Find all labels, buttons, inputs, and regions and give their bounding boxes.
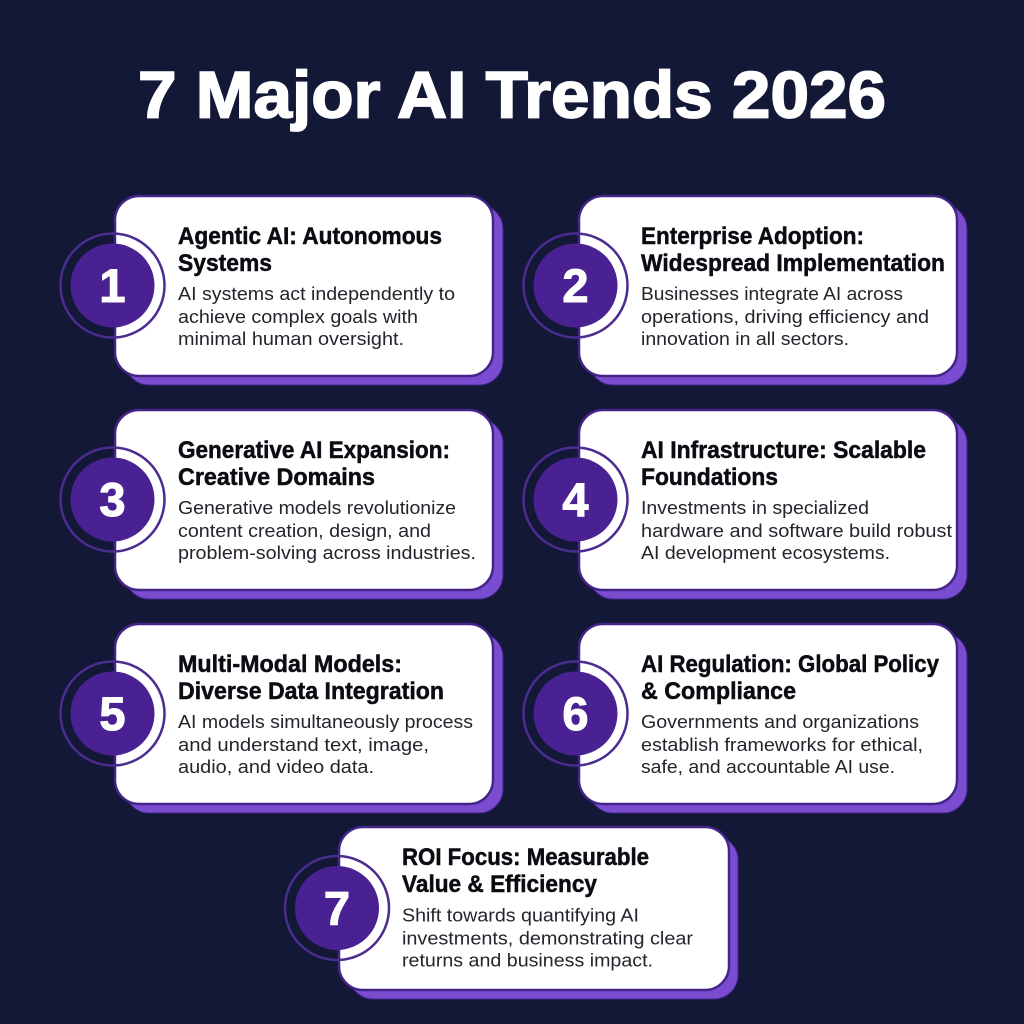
card description: Businesses integrate AI across — [641, 283, 903, 304]
number badge 3: 3 — [99, 473, 126, 526]
panel: card 3 Generative AI — [60, 410, 503, 599]
card heading — [402, 844, 649, 898]
number badge 5: 5 — [99, 687, 126, 740]
card description: content creation, design, and — [178, 520, 431, 541]
card description: safe, and accountable AI use. — [641, 756, 895, 777]
number badge 6: 6 — [562, 687, 589, 740]
card description: AI systems act independently to — [178, 283, 455, 304]
card description: hardware and software build robust — [641, 520, 952, 541]
card description — [641, 283, 929, 349]
card heading: Creative Domains — [178, 464, 375, 491]
number badge 7 — [285, 856, 389, 960]
number badge 6 — [524, 662, 628, 766]
card heading: Systems — [178, 250, 272, 277]
card heading: AI Regulation: Global Policy — [641, 651, 939, 678]
card heading — [641, 437, 926, 491]
card heading: Agentic AI: Autonomous — [178, 223, 442, 250]
card body — [115, 624, 493, 804]
card description — [402, 904, 693, 970]
card description: Generative models revolutionize — [178, 497, 456, 518]
card description: audio, and video data. — [178, 756, 374, 777]
card heading: Diverse Data Integration — [178, 678, 444, 705]
number badge 2: 2 — [562, 259, 589, 312]
card body — [115, 410, 493, 590]
card heading: Generative AI Expansion: — [178, 437, 450, 464]
card description — [178, 711, 473, 777]
number badge 4 — [524, 448, 628, 552]
card description: AI development ecosystems. — [641, 542, 890, 563]
number badge 1: 1 — [99, 259, 126, 312]
card description: minimal human oversight. — [178, 328, 404, 349]
card description: and understand text, image, — [178, 734, 429, 755]
card description: returns and business impact. — [402, 950, 653, 970]
card heading: & Compliance — [641, 678, 796, 705]
number badge 1 — [60, 234, 164, 338]
card description: AI models simultaneously process — [178, 711, 473, 732]
card body — [339, 827, 729, 990]
card description: problem-solving across industries. — [178, 542, 476, 563]
card heading: AI Infrastructure: Scalable — [641, 437, 926, 464]
card heading — [641, 223, 945, 277]
card shadow — [125, 205, 503, 385]
card shadow — [589, 419, 967, 599]
card description — [641, 497, 952, 563]
card heading: Multi-Modal Models: — [178, 651, 402, 678]
card description: Investments in specialized — [641, 497, 869, 518]
panel: card 6 AI Regulation — [524, 624, 967, 813]
card heading — [178, 223, 442, 277]
card shadow — [125, 633, 503, 813]
panel: card 4 AI Infrastructure — [524, 410, 967, 599]
number badge 5 — [60, 662, 164, 766]
card description — [641, 711, 923, 777]
card description — [178, 497, 476, 563]
card heading: ROI Focus: Measurable — [402, 844, 649, 871]
card description: achieve complex goals with — [178, 306, 418, 327]
card description: operations, driving efficiency and — [641, 306, 929, 327]
card shadow — [589, 633, 967, 813]
card description — [178, 283, 455, 349]
card body — [579, 410, 957, 590]
card shadow — [589, 205, 967, 385]
card shadow — [349, 836, 738, 999]
card heading — [178, 651, 444, 705]
card description: Governments and organizations — [641, 711, 919, 732]
number badge 4: 4 — [562, 473, 589, 526]
card description: Shift towards quantifying AI — [402, 904, 639, 926]
card description: investments, demonstrating clear — [402, 928, 693, 948]
card body — [579, 196, 957, 376]
card heading — [178, 437, 450, 491]
number badge 3 — [60, 448, 164, 552]
panel: card 7 ROI Focus — [285, 827, 738, 999]
panel: card 1 Agentic AI — [60, 196, 503, 385]
card heading: Foundations — [641, 464, 778, 491]
panel: card 5 Multi-Modal Models — [60, 624, 503, 813]
card body — [115, 196, 493, 376]
card heading: Enterprise Adoption: — [641, 223, 864, 250]
card heading — [641, 651, 939, 705]
panel: card 2 Enterprise Adoption — [524, 196, 967, 385]
card heading: Widespread Implementation — [641, 250, 945, 277]
card description: establish frameworks for ethical, — [641, 734, 923, 755]
title: 7 Major AI Trends 2026 — [138, 58, 886, 132]
number badge 7: 7 — [324, 882, 350, 935]
number badge 2 — [524, 234, 628, 338]
card shadow — [125, 419, 503, 599]
card heading: Value & Efficiency — [402, 871, 597, 898]
card body — [579, 624, 957, 804]
card description: innovation in all sectors. — [641, 328, 849, 349]
